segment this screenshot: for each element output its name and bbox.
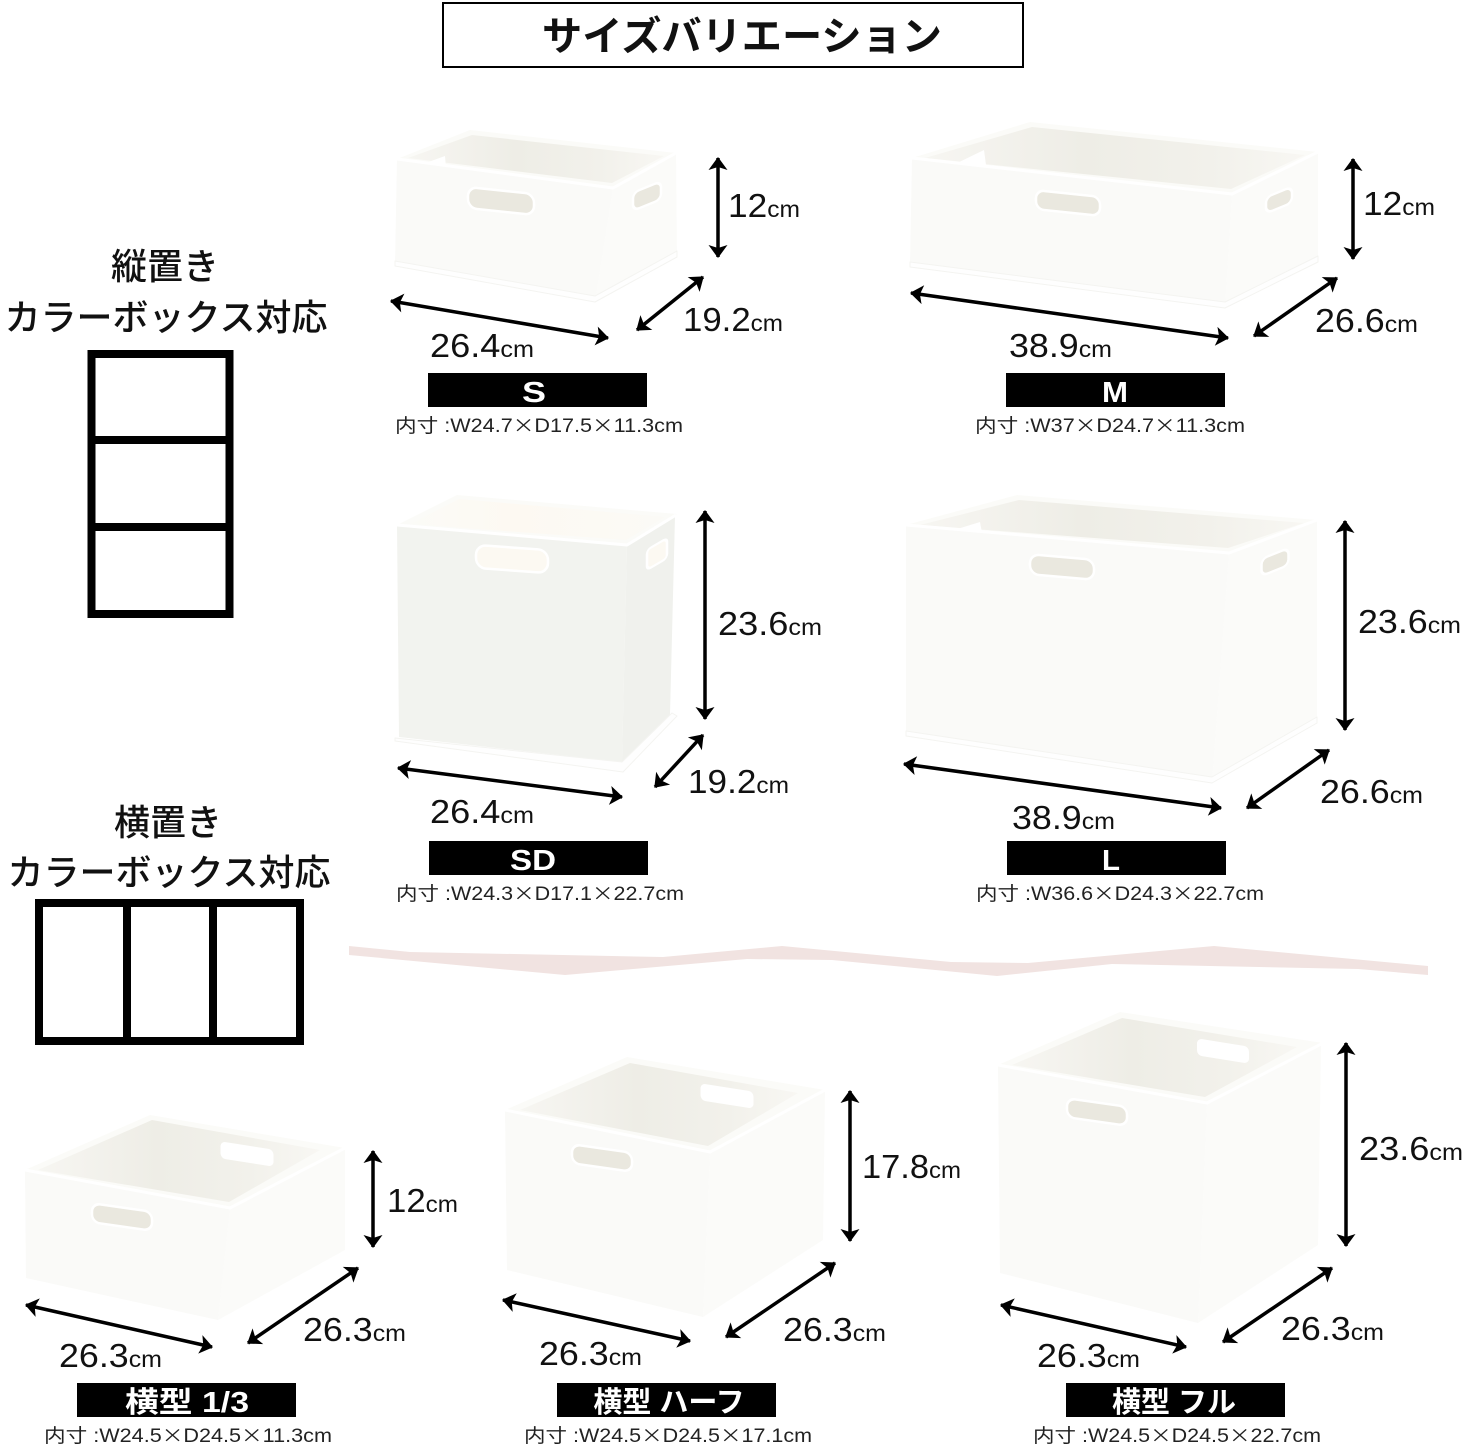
panel: horizontal color box compatibility <box>8 802 330 1041</box>
size tag: S <box>428 373 647 409</box>
inner dimensions: M: 内寸 :W37 ×D24.7 ×11.3cm <box>975 411 1245 438</box>
size tag: SD: SD <box>510 845 556 877</box>
size tag: horizontal 1/3: 横型 1/3 <box>125 1386 249 1419</box>
size tag: horizontal full: 横型 フル <box>1112 1386 1236 1419</box>
title: サイズバリエーション <box>542 15 942 59</box>
icon: vertical three-shelf frame <box>91 354 230 614</box>
heading: vertical placement: 縦置き <box>111 246 219 287</box>
box photo: L <box>906 495 1317 783</box>
arrow: width 26.4cm <box>398 768 622 797</box>
label: 19.2cm: 19.2cm <box>688 763 789 800</box>
panel: size S <box>391 130 800 438</box>
heading: color box compatible: カラーボックス対応 <box>8 852 330 893</box>
panel: horizontal full <box>998 1012 1463 1446</box>
size tag: M <box>1006 373 1225 409</box>
label: 38.9cm: 38.9cm <box>1009 327 1112 364</box>
label: 26.3cm: 26.3cm <box>783 1311 886 1348</box>
arrow: width 26.4cm <box>391 301 608 338</box>
arrow: width 26.3cm <box>1001 1305 1186 1347</box>
box photo: SD <box>395 495 677 772</box>
panel: size L <box>904 495 1461 906</box>
panel: horizontal 1/3 <box>25 1115 458 1446</box>
label: 19.2cm: 19.2cm <box>683 301 783 338</box>
arrow: width 26.3cm <box>26 1305 212 1347</box>
heading: horizontal placement: 横置き <box>114 802 222 843</box>
arrow: height 23.6cm <box>703 511 707 719</box>
label: 12cm: 12cm <box>728 187 800 224</box>
box photo: horizontal half <box>505 1057 825 1317</box>
box photo: horizontal full <box>998 1012 1323 1323</box>
inner dimensions: SD: 内寸 :W24.3 ×D17.1 ×22.7cm <box>396 879 684 906</box>
label: 12cm: 12cm <box>1363 185 1435 222</box>
box photo: M <box>910 122 1318 308</box>
size tag: M: M <box>1102 377 1128 409</box>
size tag: L: L <box>1102 845 1120 877</box>
label: 23.6cm: 23.6cm <box>1358 603 1461 640</box>
label: 17.8cm: 17.8cm <box>862 1148 961 1185</box>
inner dimensions: S: 内寸 :W24.7 ×D17.5 ×11.3cm <box>395 411 683 438</box>
panel: horizontal half <box>503 1057 961 1446</box>
arrow: depth 26.3cm <box>1223 1268 1332 1342</box>
label: 26.3cm: 26.3cm <box>1037 1337 1140 1374</box>
heading: color box compatible: カラーボックス対応 <box>4 297 327 338</box>
label: 26.3cm: 26.3cm <box>539 1335 642 1372</box>
label: 23.6cm: 23.6 cm <box>1359 1130 1463 1167</box>
arrow: depth 26.3cm <box>248 1268 358 1343</box>
arrow: height 12cm <box>1351 159 1355 259</box>
panel: vertical color box compatibility <box>4 246 327 614</box>
arrow: depth 26.6cm <box>1247 750 1329 808</box>
box photo: horizontal 1/3 <box>25 1115 345 1320</box>
label: 23.6cm: 23.6 cm <box>718 605 822 642</box>
label: 26.3cm: 26.3cm <box>303 1311 406 1348</box>
inner dimensions: L: 内寸 :W36.6 ×D24.3 ×22.7cm <box>976 879 1264 906</box>
arrow: width 38.9cm <box>911 293 1228 338</box>
label: 26.4cm: 26.4 cm <box>430 327 534 364</box>
label: 38.9cm: 38.9cm <box>1012 799 1115 836</box>
label: 26.4cm: 26.4 cm <box>430 793 534 830</box>
arrow: depth 26.3cm <box>726 1263 835 1337</box>
size tag: horizontal half: 横型 ハーフ <box>593 1386 745 1419</box>
arrow: height 23.6cm <box>1343 521 1347 730</box>
title <box>443 3 1023 67</box>
label: 26.3cm: 26.3cm <box>59 1337 162 1374</box>
label: 26.3cm: 26.3cm <box>1281 1310 1384 1347</box>
size tag: horizontal 1/3 <box>77 1383 296 1419</box>
size tag: horizontal half <box>557 1383 776 1419</box>
size tag: S: S <box>522 377 546 409</box>
decorative divider: pale pink wavy band <box>349 946 1428 976</box>
size tag: horizontal full <box>1066 1383 1285 1419</box>
label: 12cm: 12cm <box>387 1182 458 1219</box>
arrow: height 17.8cm <box>848 1091 852 1241</box>
arrow: depth 26.6cm <box>1254 278 1337 336</box>
label: 26.6cm: 26.6cm <box>1315 302 1418 339</box>
panel: size SD <box>395 495 822 906</box>
panel: size M <box>910 122 1435 438</box>
arrow: depth 19.2cm <box>655 735 703 787</box>
arrow: width 38.9cm <box>904 764 1221 808</box>
size tag: L <box>1007 841 1226 877</box>
arrow: width 26.3cm <box>503 1300 690 1341</box>
box photo: S <box>395 130 677 302</box>
arrow: height 12cm <box>371 1151 375 1247</box>
arrow: height 12cm <box>716 158 720 257</box>
icon: horizontal three-compartment frame <box>39 903 300 1041</box>
arrow: depth 19.2cm <box>637 277 703 330</box>
label: 26.6cm: 26.6cm <box>1320 773 1423 810</box>
size tag: SD <box>429 841 648 877</box>
arrow: height 23.6cm <box>1344 1043 1348 1246</box>
